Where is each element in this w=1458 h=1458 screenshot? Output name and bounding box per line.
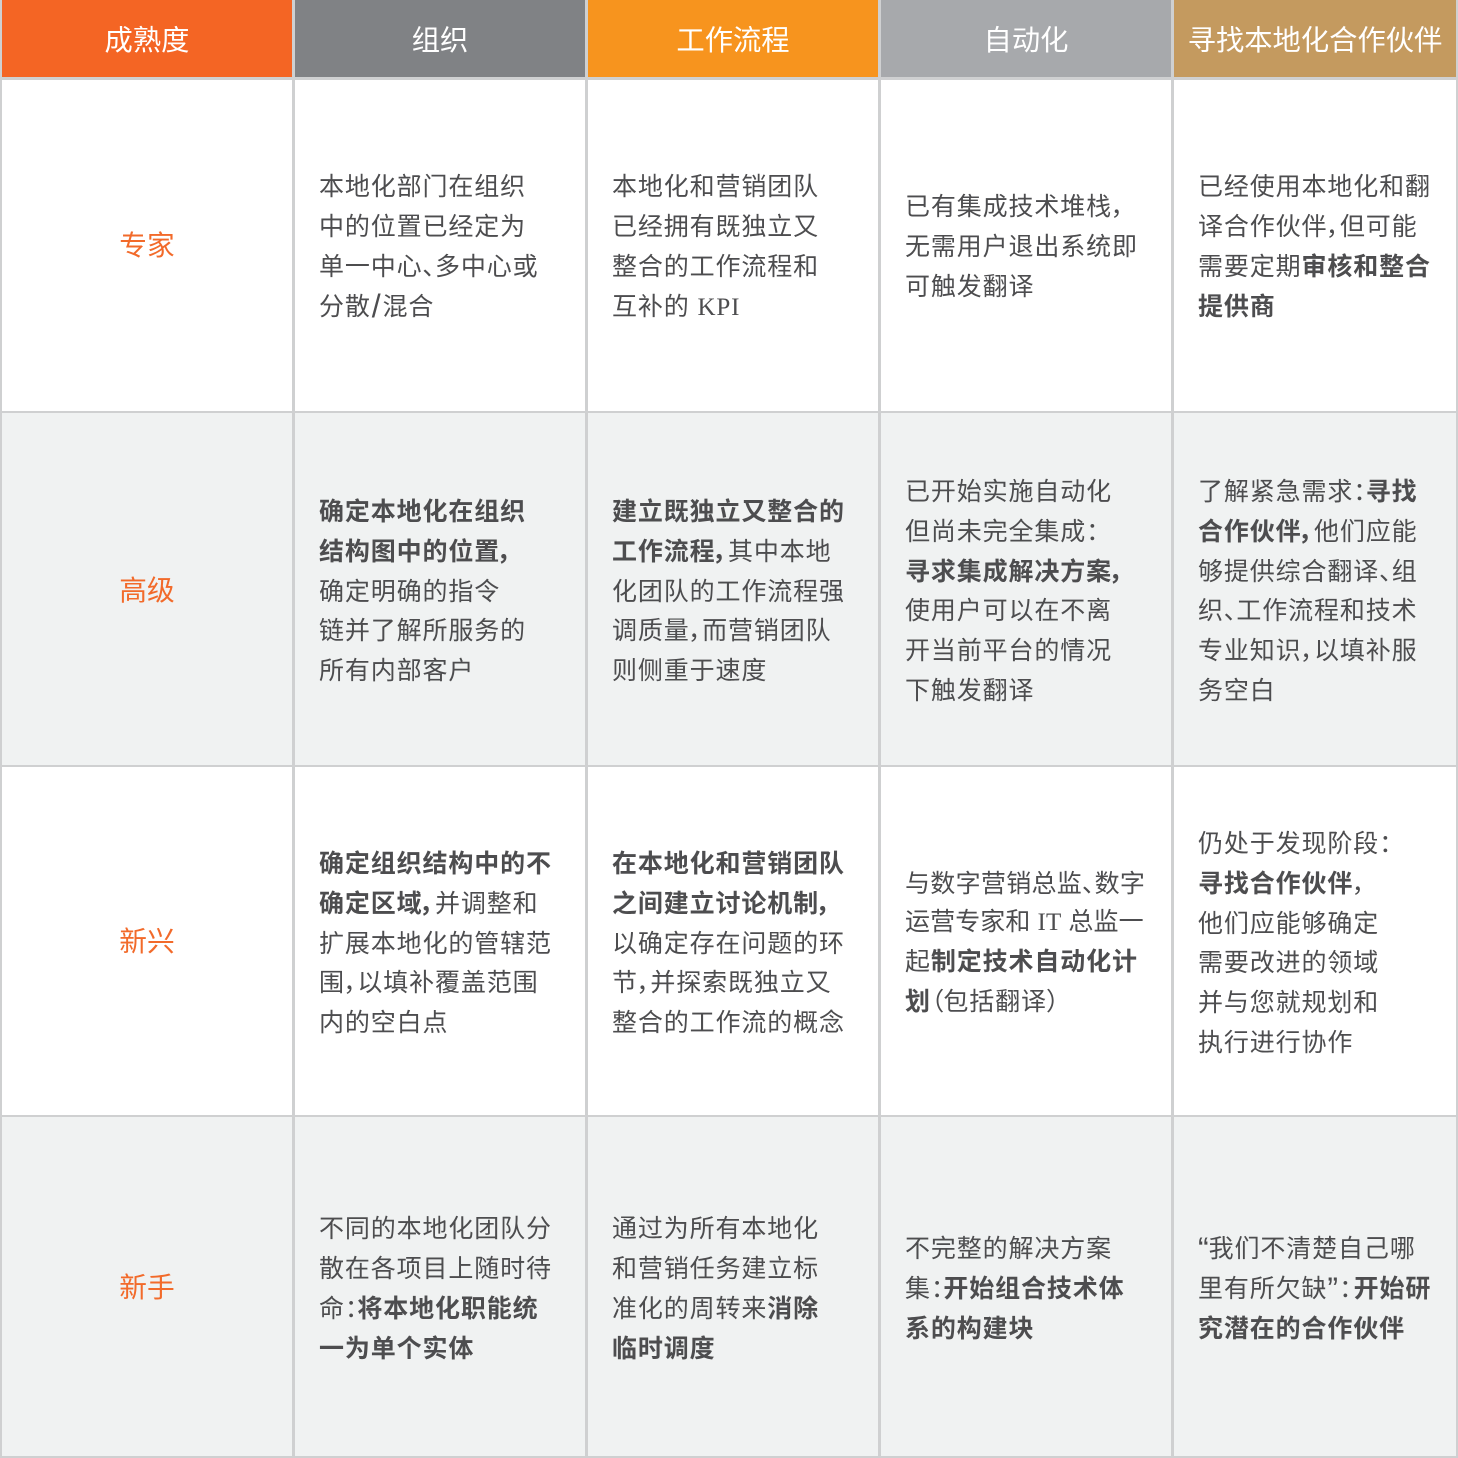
panel: 高级 组织: 确定明确的指令	[319, 578, 500, 606]
panel: 新手 工作流程: 通过为所有本地化	[612, 1215, 819, 1243]
panel: 专家 自动化	[881, 80, 1171, 411]
panel: 专家 工作流程: 本地化和营销团队	[612, 173, 819, 201]
panel: 高级 自动化: 下触发翻译	[905, 677, 1034, 705]
panel: 高级 自动化: 开当前平台的情况	[905, 637, 1112, 665]
panel: 专家 工作流程: 整合的工作流程和	[612, 253, 819, 281]
panel: 新兴 组织: 扩展本地化的管辖范	[319, 930, 552, 958]
panel: 新兴 自动化	[881, 767, 1171, 1115]
panel: 高级 组织: 链并了解所服务的	[319, 617, 526, 645]
panel: 新兴 寻找本地化合作伙伴: 他们应能够确定	[1198, 910, 1379, 938]
panel: 专家 寻找本地化合作伙伴: 需要定期审核和整合	[1198, 253, 1431, 281]
panel: 专家 寻找本地化合作伙伴: 已经使用本地化和翻	[1198, 173, 1431, 201]
panel: 新手 自动化: 系的构建块	[905, 1315, 1034, 1343]
panel: 新手 工作流程: 临时调度	[612, 1335, 716, 1363]
panel: 新兴 寻找本地化合作伙伴: 执行进行协作	[1198, 1029, 1353, 1057]
header: 工作流程: 工作流程	[676, 24, 790, 56]
panel: 新兴 组织: 围，以填补覆盖范围	[319, 969, 539, 997]
panel: 新兴 自动化: 运营专家和 IT 总监一	[905, 908, 1144, 936]
panel: 专家 组织: 中的位置已经定为	[319, 213, 526, 241]
header: 成熟度	[2, 0, 292, 77]
panel: 专家 寻找本地化合作伙伴	[1174, 80, 1456, 411]
panel: 高级 自动化	[881, 413, 1171, 765]
panel: 高级 自动化: 但尚未完全集成：	[905, 518, 1099, 546]
panel: 新兴 寻找本地化合作伙伴: 寻找合作伙伴，	[1198, 870, 1366, 898]
panel: 新兴 寻找本地化合作伙伴: 仍处于发现阶段：	[1198, 830, 1392, 858]
panel: 专家 组织: 本地化部门在组织	[319, 173, 526, 201]
panel: 新手 组织: 命：将本地化职能统	[319, 1295, 539, 1323]
panel: 专家 寻找本地化合作伙伴: 译合作伙伴，但可能	[1198, 213, 1418, 241]
panel: 新兴 自动化: 与数字营销总监、数字	[905, 870, 1145, 898]
panel: 专家 组织	[295, 80, 585, 411]
panel: 专家 工作流程: 已经拥有既独立又	[612, 213, 819, 241]
panel: 高级 组织: 结构图中的位置，	[319, 538, 513, 566]
panel: 高级 工作流程: 化团队的工作流程强	[612, 578, 845, 606]
panel: 新兴 工作流程: 整合的工作流的概念	[612, 1009, 845, 1037]
panel: 专家 工作流程: 互补的 KPI	[612, 293, 740, 321]
panel: 高级 自动化: 已开始实施自动化	[905, 478, 1112, 506]
panel: 新兴 工作流程: 节，并探索既独立又	[612, 969, 832, 997]
row label panel: 新兴	[2, 767, 292, 1115]
panel: 高级 组织: 确定本地化在组织	[319, 498, 526, 526]
panel: 高级 寻找本地化合作伙伴: 织、工作流程和技术	[1198, 597, 1418, 625]
panel: 高级 工作流程	[588, 413, 878, 765]
panel: 专家 寻找本地化合作伙伴: 提供商	[1198, 293, 1276, 321]
panel: 高级 寻找本地化合作伙伴: 合作伙伴，他们应能	[1198, 518, 1418, 546]
panel: 新手 工作流程: 和营销任务建立标	[612, 1255, 819, 1283]
panel: 高级 自动化: 寻求集成解决方案，	[905, 558, 1125, 586]
panel: 新手 组织: 不同的本地化团队分	[319, 1215, 552, 1243]
panel: 高级 寻找本地化合作伙伴: 专业知识，以填补服	[1198, 637, 1418, 665]
row label panel: 专家	[2, 80, 292, 411]
panel: 新兴 工作流程: 在本地化和营销团队	[612, 850, 845, 878]
panel: 新手 工作流程	[588, 1117, 878, 1456]
panel: 新手 自动化	[881, 1117, 1171, 1456]
panel: 新兴 组织: 确定区域，并调整和	[319, 890, 539, 918]
panel: 专家 组织: 单一中心、多中心或	[319, 253, 539, 281]
panel: 专家 工作流程	[588, 80, 878, 411]
panel: 新手 工作流程: 准化的周转来消除	[612, 1295, 819, 1323]
panel: 高级 寻找本地化合作伙伴	[1174, 413, 1456, 765]
panel: 高级 工作流程: 工作流程，其中本地	[612, 538, 832, 566]
panel: 高级 组织: 所有内部客户	[319, 657, 474, 685]
panel: 新手 寻找本地化合作伙伴: “我们不清楚自己哪	[1198, 1231, 1416, 1267]
panel: 新兴 组织: 内的空白点	[319, 1009, 448, 1037]
panel: 高级 工作流程: 调质量，而营销团队	[612, 617, 832, 645]
panel: 新手 组织: 散在各项目上随时待	[319, 1255, 552, 1283]
panel: 专家 组织: 分散/混合	[319, 288, 434, 324]
panel: 新手 寻找本地化合作伙伴: 究潜在的合作伙伴	[1198, 1315, 1405, 1343]
row label panel: 专家: 专家	[119, 230, 175, 261]
header: 工作流程	[588, 0, 878, 77]
panel: 新手 寻找本地化合作伙伴: 里有所欠缺”：开始研	[1198, 1271, 1431, 1307]
panel: 新兴 工作流程: 之间建立讨论机制，	[612, 890, 832, 918]
row label panel: 高级: 高级	[119, 575, 175, 606]
panel: 新兴 寻找本地化合作伙伴	[1174, 767, 1456, 1115]
header: 组织	[295, 0, 585, 77]
header: 自动化	[881, 0, 1171, 77]
panel: 专家 自动化: 无需用户退出系统即	[905, 233, 1138, 261]
row label panel: 高级	[2, 413, 292, 765]
panel: 新手 组织: 一为单个实体	[319, 1335, 474, 1363]
panel: 新兴 自动化: 起制定技术自动化计	[905, 948, 1138, 976]
header: 寻找本地化合作伙伴	[1174, 0, 1456, 77]
header: 自动化: 自动化	[984, 24, 1068, 56]
panel: 新手 组织	[295, 1117, 585, 1456]
panel: 新兴 组织: 确定组织结构中的不	[319, 850, 552, 878]
row label panel: 新兴: 新兴	[119, 926, 175, 957]
panel: 专家 自动化: 已有集成技术堆栈，	[905, 193, 1125, 221]
header: 组织: 组织	[412, 24, 468, 56]
panel: 高级 寻找本地化合作伙伴: 了解紧急需求：寻找	[1198, 478, 1418, 506]
row label panel: 新手	[2, 1117, 292, 1456]
header: 寻找本地化合作伙伴: 寻找本地化合作伙伴	[1188, 24, 1442, 56]
header: 成熟度: 成熟度	[105, 24, 189, 56]
panel: 新手 自动化: 集：开始组合技术体	[905, 1275, 1125, 1303]
panel: 高级 寻找本地化合作伙伴: 够提供综合翻译、组	[1198, 558, 1418, 586]
panel: 新兴 工作流程	[588, 767, 878, 1115]
panel: 高级 组织	[295, 413, 585, 765]
panel: 新兴 寻找本地化合作伙伴: 并与您就规划和	[1198, 989, 1379, 1017]
panel: 高级 工作流程: 建立既独立又整合的	[612, 498, 845, 526]
panel: 新兴 寻找本地化合作伙伴: 需要改进的领域	[1198, 949, 1379, 977]
panel: 高级 工作流程: 则侧重于速度	[612, 657, 767, 685]
panel: 新兴 工作流程: 以确定存在问题的环	[612, 930, 845, 958]
row label panel: 新手: 新手	[119, 1272, 175, 1303]
panel: 高级 自动化: 使用户可以在不离	[905, 597, 1112, 625]
panel: 新兴 自动化: 划（包括翻译）	[905, 988, 1059, 1016]
panel: 新手 自动化: 不完整的解决方案	[905, 1235, 1112, 1263]
panel: 专家 自动化: 可触发翻译	[905, 273, 1034, 301]
panel: 高级 寻找本地化合作伙伴: 务空白	[1198, 677, 1276, 705]
panel: 新手 寻找本地化合作伙伴	[1174, 1117, 1456, 1456]
panel: 新兴 组织	[295, 767, 585, 1115]
